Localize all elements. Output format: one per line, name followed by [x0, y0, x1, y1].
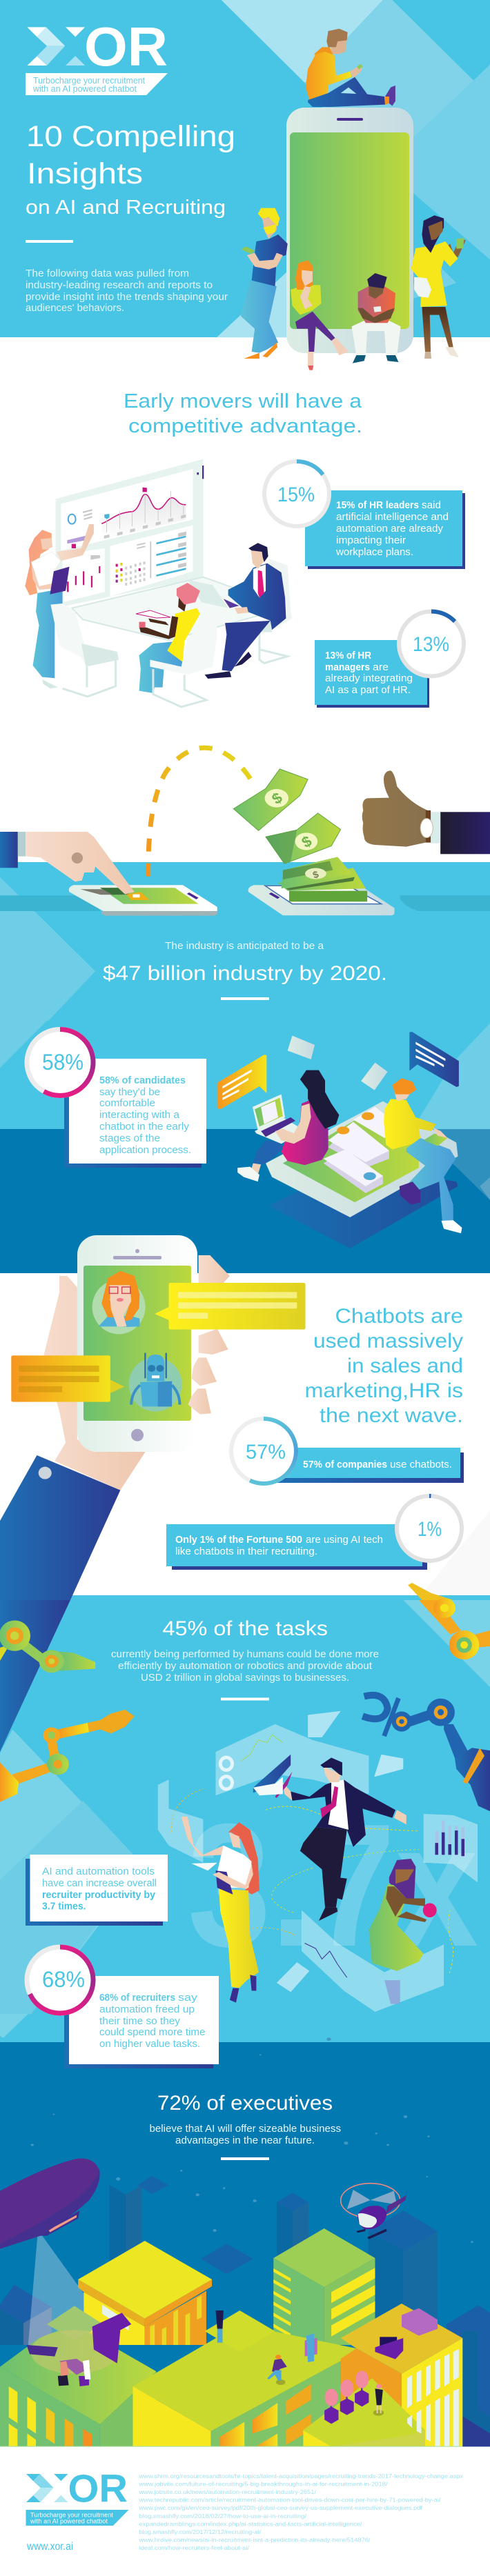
- panel: stat 68%: on higher value tasks.: [99, 2038, 200, 2050]
- heading: 45% of the tasks: USD 2 trillion in global savings to businesses.: [141, 1673, 349, 1684]
- man sitting: [352, 273, 401, 363]
- table: [72, 577, 277, 640]
- illustration: hand holding phone with chatbot: [0, 1276, 146, 1600]
- avatar: robot: [129, 1353, 182, 1412]
- panel: stat 57%: 57%: [246, 1441, 286, 1464]
- illustration: people chatting on tablet: [217, 1032, 462, 1248]
- panel: stat 57%: use chatbots.: [390, 1459, 452, 1470]
- woman with laptop: [237, 1070, 339, 1181]
- stat: $47 billion: [103, 940, 387, 985]
- bottom edge: [0, 2446, 462, 2448]
- heading: chatbots: in sales and: [347, 1355, 463, 1377]
- panel: stat 1%: 1%: [418, 1518, 442, 1541]
- panel: recruiter productivity: [26, 1855, 168, 1926]
- left green building: [0, 2306, 156, 2446]
- background towers: [0, 2176, 490, 2345]
- intro paragraph: industry-leading research and reports to: [26, 279, 213, 291]
- panel: stat 15%: automation are already: [336, 523, 444, 535]
- panel: stat 57%: [231, 1419, 464, 1484]
- panel bar chart: [435, 1821, 464, 1856]
- stat: $47 billion: The industry is anticipated to be a: [165, 940, 324, 952]
- panel: stat 68%: say: [178, 1992, 198, 2004]
- heading: chatbots: [305, 1305, 463, 1427]
- intro paragraph: audiences' behaviors.: [26, 302, 124, 314]
- heading: early movers: competitive advantage.: [128, 415, 362, 437]
- man with tablet: [384, 1078, 462, 1233]
- robot arm orange: [419, 1598, 490, 1659]
- panel: stat 1%: are using AI tech: [306, 1534, 383, 1546]
- panel: stat 68%: [27, 1947, 219, 2068]
- heading: 45% of the tasks: currently being performed by humans could be done more: [111, 1649, 379, 1660]
- woman standing right: [411, 215, 466, 359]
- panel: stat 58%: stages of the: [99, 1132, 160, 1144]
- panel charts: [172, 1735, 453, 1977]
- robot arm blue: [362, 1695, 490, 1811]
- panel: stat 15%: 15%: [277, 483, 315, 506]
- yellow building: [78, 2241, 212, 2345]
- panel: stat 58%: comfortable: [99, 1097, 155, 1109]
- sources list: blog.smashfly.com/2017/12/12/recruiting-ai/: [139, 2528, 262, 2535]
- panel: stat 58%: say they'd be: [99, 1086, 160, 1098]
- panel: stat 68%: 68%: [42, 1967, 85, 1992]
- heading: 45% of the tasks: 45% of the tasks: [163, 1617, 328, 1640]
- robot arm top-right orange: [408, 1583, 453, 1600]
- panel: stat 1%: [166, 1496, 462, 1570]
- sources list: [138, 2473, 464, 2551]
- hero background triangles: [217, 0, 490, 337]
- panel: stat 1%: like chatbots in their recruiting.: [175, 1546, 317, 1557]
- panel: stat 15%: said: [422, 500, 441, 511]
- footer tagline: with an AI powered chatbot: [30, 2517, 108, 2526]
- panel: stat 15%: artificial intelligence and: [336, 512, 449, 523]
- icon: dollar signs on banknotes: $: [311, 868, 320, 881]
- heading: 72% of executives: advantages in the near future.: [175, 2135, 315, 2146]
- icon: speech bubble blue: [409, 1032, 459, 1087]
- chat contents and fingers: [11, 1255, 305, 1415]
- woman with clock: [369, 1859, 437, 2004]
- tiny people: [216, 2310, 384, 2416]
- website link: www.xor.ai: [26, 2541, 73, 2553]
- person sitting on phone: [306, 29, 395, 107]
- intro paragraph: provide insight into the trends shaping your: [26, 291, 228, 303]
- logo tagline: with an AI powered chatbot: [32, 83, 137, 94]
- illustration: isometric city: [0, 2037, 490, 2345]
- icon: dollar signs on banknotes: $: [299, 832, 315, 851]
- panel: stat 58%: [27, 1029, 206, 1168]
- title: [26, 120, 235, 219]
- chair left: [50, 603, 119, 697]
- heading: chatbots: marketing,HR is: [305, 1379, 463, 1402]
- helicopter: [341, 2184, 409, 2239]
- heading: 72% of executives: 72% of executives: [157, 2092, 333, 2115]
- woman presenting: [25, 524, 94, 688]
- banknotes: [233, 769, 341, 863]
- intro paragraph: [26, 268, 228, 314]
- intro paragraph: The following data was pulled from: [26, 268, 189, 279]
- chat section decoration: [0, 1021, 490, 1200]
- sources list: www.pwc.com/gx/en/ceo-survey/pdf/20th-global-ceo-survey-us-supplement-executive-dialogues.pdf: [138, 2504, 423, 2511]
- sleeve: [0, 1455, 120, 1600]
- logo tagline: Turbocharge your recruitment: [33, 75, 145, 86]
- center building: [133, 2310, 356, 2446]
- title: 10 Compelling: [26, 120, 235, 153]
- right dark blue building: [462, 2331, 490, 2446]
- heading: chatbots: used massively: [313, 1330, 463, 1352]
- footer tagline: Turbocharge your recruitment: [30, 2512, 113, 2519]
- panel: stat 15%: workplace plans.: [335, 547, 413, 558]
- panel: stat 13%: are: [373, 662, 389, 673]
- illustration: dashboard meeting: [25, 459, 292, 707]
- stat: $47 billion: $47 billion industry by 2020.: [103, 962, 387, 985]
- tablet: [266, 1101, 458, 1248]
- woman with notebook: [182, 1817, 259, 2003]
- right phone with money: [248, 857, 395, 915]
- panel: stat 58%: 58% of candidates: [99, 1075, 186, 1086]
- panel: recruiter productivity: 3.7 times.: [42, 1901, 86, 1912]
- avatar: woman with glasses: [92, 1271, 146, 1334]
- heading: 45% of the tasks: efficiently by automation or robotics and provide about: [118, 1661, 372, 1672]
- blue section decoration: [0, 877, 490, 1021]
- icon: dollar signs on banknotes: $: [268, 789, 285, 808]
- panel: stat 13%: [315, 611, 464, 708]
- panel: stat 13%: already integrating: [325, 673, 413, 684]
- panel: stat 1%: Only 1% of the Fortune 500: [175, 1534, 302, 1546]
- panel: recruiter productivity: AI and automation tools: [42, 1866, 155, 1877]
- logo: XOR: OR: [84, 16, 168, 77]
- chat bubble yellow: [155, 1283, 305, 1330]
- illustration: people with floating data panels: [158, 1711, 478, 2012]
- heading: chatbots: Chatbots are: [335, 1305, 463, 1328]
- man standing left: [241, 208, 288, 359]
- big phone: [286, 108, 413, 353]
- panel: stat 15%: impacting their: [336, 535, 406, 546]
- sources list: www.hrdive.com/news/ai-in-recruitment-isnt-a-prediction-its-already-here/514876/: [138, 2537, 371, 2544]
- logo: footer XOR: OR: [68, 2466, 128, 2510]
- arrow: dashed arc: [148, 748, 255, 877]
- panel: stat 68%: their time so they: [99, 2015, 181, 2027]
- dashboard screen: [56, 459, 204, 608]
- icon: dollar signs on banknotes: [268, 789, 320, 881]
- robot arms: [0, 1583, 490, 1811]
- sources list: www.techrepublic.com/article/recruitment-automation-tool-drives-down-cost-per-hire-by-71-powered-by-ai/: [138, 2497, 441, 2504]
- panel: stat 13%: 13%: [413, 633, 449, 656]
- robot arm green: [0, 1620, 95, 1673]
- panel: stat 57%: 57% of companies: [303, 1459, 387, 1470]
- sources list: expandedramblings.com/index.php/ai-statistics-and-facts-artificial-intelligence/: [139, 2520, 362, 2527]
- panel: stat 58%: 58%: [42, 1050, 84, 1075]
- panel: stat 68%: automation freed up: [99, 2004, 195, 2015]
- sources list: blog.smashfly.com/2018/02/27/how-to-use-ai-in-recruiting/: [139, 2513, 307, 2519]
- icon: envelopes: [288, 1036, 388, 1090]
- title: on AI and Recruiting: [26, 197, 226, 219]
- sources list: www.jobsite.co.uk/news/automation-recruitment-industry-2651/: [138, 2488, 317, 2495]
- logo: footer XOR: [26, 2466, 128, 2510]
- thumbs up hand: [362, 770, 490, 854]
- illustration: mobile payment: [0, 748, 490, 916]
- man with book: [253, 1755, 406, 1921]
- panel: recruiter productivity: recruiter productivity by: [42, 1889, 156, 1901]
- logo: XOR: [27, 16, 168, 77]
- footer tagline: [26, 2510, 128, 2526]
- sources list: ideal.com/how-recruiters-feel-about-ai/: [139, 2544, 250, 2551]
- heading: early movers: Early movers will have a: [124, 390, 362, 412]
- panel: stat 58%: chatbot in the early: [99, 1121, 190, 1132]
- panel: stat 13%: managers: [325, 662, 370, 673]
- stars: [30, 2037, 473, 2243]
- chatbot phone: [77, 1235, 197, 1452]
- woman seated at table: [136, 583, 217, 707]
- potted trees: [324, 2370, 369, 2424]
- panel: stat 13%: 13% of HR: [325, 650, 371, 661]
- automation section decoration: [0, 1510, 490, 2038]
- panel: stat 58%: application process.: [99, 1144, 191, 1156]
- left hand tapping phone: [0, 832, 217, 916]
- sources list: www.shrm.org/resourcesandtools/hr-topics/talent-acquisition/pages/recruiting-trends-2017-technology-change.aspx: [138, 2473, 464, 2479]
- title: Insights: [27, 157, 143, 190]
- heading: early movers: [124, 390, 362, 437]
- city foreground buildings: [0, 2304, 490, 2447]
- chat bubble orange: [11, 1355, 124, 1402]
- panel: stat 13%: AI as a part of HR.: [325, 685, 411, 696]
- panel: stat 15%: [264, 461, 465, 569]
- logo tagline: [26, 73, 168, 95]
- sources list: www.jobvite.com/future-of-recruiting/5-big-breakthroughs-in-ai-for-recruitment-in-2018/: [138, 2480, 388, 2487]
- heading: 72% of executives: [149, 2092, 341, 2146]
- panel: stat 68%: could spend more time: [99, 2026, 206, 2038]
- airship: [0, 2159, 99, 2345]
- right building: [303, 2304, 462, 2446]
- people around phone: [241, 29, 466, 370]
- green building: [273, 2228, 375, 2345]
- robot arm with hand: [0, 1710, 135, 1802]
- woman sitting: [291, 260, 349, 370]
- floating panels: [158, 1711, 478, 2012]
- icon: speech bubble yellow: [217, 1055, 266, 1109]
- panel: stat 15%: 15% of HR leaders: [336, 500, 419, 511]
- panel: stat 58%: interacting with a: [99, 1109, 180, 1121]
- heading: 72% of executives: believe that AI will offer sizeable business: [149, 2123, 341, 2135]
- heading: 45% of the tasks: [111, 1617, 379, 1684]
- panel: recruiter productivity: have can increase overall: [42, 1877, 157, 1889]
- sleeve continuation: [0, 1600, 70, 1752]
- hand back: [43, 1276, 146, 1490]
- panel: stat 68%: 68% of recruiters: [99, 1992, 175, 2004]
- heading: chatbots: the next wave.: [320, 1404, 463, 1427]
- chair back-right: [248, 559, 292, 663]
- fingers: [188, 1255, 230, 1415]
- man at laptop: [188, 543, 286, 679]
